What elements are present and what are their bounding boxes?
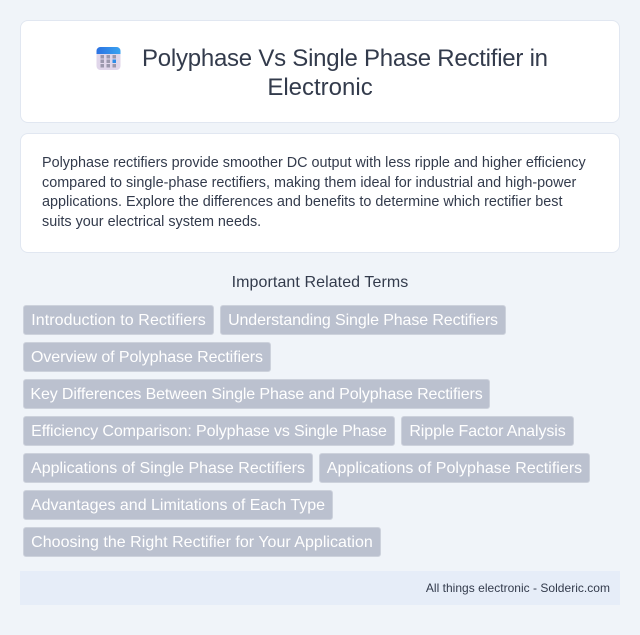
tag xyxy=(23,527,381,557)
title: Electronic xyxy=(267,74,373,101)
tag xyxy=(23,490,333,520)
intro paragraph: Polyphase rectifiers provide smoother DC output with less ripple and higher efficiency xyxy=(42,155,586,171)
header card xyxy=(20,20,620,123)
tag xyxy=(23,342,271,372)
title: Polyphase Vs Single Phase Rectifier in xyxy=(142,45,548,72)
tag list xyxy=(23,305,590,557)
intro paragraph: suits your electrical system needs. xyxy=(42,214,261,230)
tag: Efficiency Comparison: Polyphase vs Single Phase xyxy=(31,423,387,440)
tag xyxy=(23,416,395,446)
tag xyxy=(401,416,574,446)
tag: Advantages and Limitations of Each Type xyxy=(31,497,325,514)
intro paragraph xyxy=(42,155,586,230)
title xyxy=(142,45,548,101)
tag: Understanding Single Phase Rectifiers xyxy=(228,312,498,329)
tag: Overview of Polyphase Rectifiers xyxy=(31,349,263,366)
tag xyxy=(23,379,490,409)
icon: calendar grid xyxy=(96,47,120,70)
tag: Introduction to Rectifiers xyxy=(31,312,206,329)
tag xyxy=(220,305,506,335)
tag: Applications of Single Phase Rectifiers xyxy=(31,460,305,477)
footer credit: All things electronic - Solderic.com xyxy=(426,581,610,595)
tag: Choosing the Right Rectifier for Your Application xyxy=(31,534,373,551)
tag xyxy=(23,305,214,335)
tag: Applications of Polyphase Rectifiers xyxy=(327,460,582,477)
tag: Ripple Factor Analysis xyxy=(409,423,566,440)
intro paragraph: applications. Explore the differences and benefits to determine which rectifier best xyxy=(42,194,562,210)
footer xyxy=(20,571,620,605)
tag xyxy=(319,453,590,483)
intro paragraph: compared to single-phase rectifiers, making them ideal for industrial and high-power xyxy=(42,174,576,190)
tag: Key Differences Between Single Phase and Polyphase Rectifiers xyxy=(30,386,483,403)
tag xyxy=(23,453,313,483)
intro text panel xyxy=(20,133,620,253)
section heading: Important Related Terms xyxy=(232,274,408,291)
